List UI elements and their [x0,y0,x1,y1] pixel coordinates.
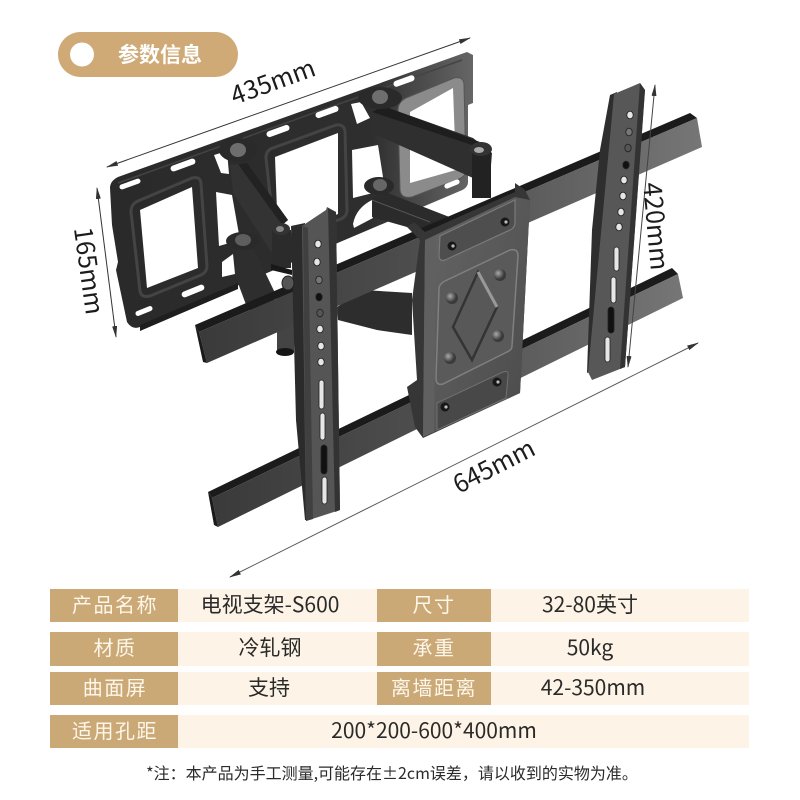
window 3 [398,78,466,197]
arm: centre rear [337,290,412,335]
plate slots [119,74,460,317]
row 2: material and load: 承重 [412,632,456,661]
dimension line: 645mm [230,343,698,577]
lower crossbar [208,268,683,527]
row 3: curved screen and wall distance [50,672,749,705]
row 4: hole spacing [50,715,749,748]
rail holes [605,111,633,362]
dimension line: 645mm: 645mm [446,429,541,501]
wall plate [110,52,473,331]
row 3: curved screen and wall distance: 支持 [248,672,290,702]
bolts [440,218,510,412]
dimension line: 435mm [107,38,470,167]
row 1: name and size: 32-80英寸 [542,589,638,619]
row 4: hole spacing: 适用孔距 [72,715,158,744]
diamond [453,272,497,360]
row 3: curved screen and wall distance: 离墙距离 [391,672,477,701]
row 1: name and size: 电视支架-S600 [201,589,339,619]
row 1: name and size: 尺寸 [412,589,456,618]
upper crossbar [195,113,702,363]
row 3: curved screen and wall distance: 42-350mm [541,672,645,702]
row 2: material and load: 材质 [94,632,136,661]
dimension line: 165mm: 165mm [66,225,114,317]
dimension line: 165mm [66,188,116,337]
arm: upper right [358,87,492,198]
spec table [50,589,749,748]
row 1: name and size: 产品名称 [72,589,158,618]
footnote: *注：本产品为手工测量,可能存在±2cm误差，请以收到的实物为准。 [146,760,638,784]
dimension line: 435mm: 435mm [225,49,320,113]
dimples [444,269,506,364]
swivel arms [219,87,492,356]
window 2 [266,125,347,240]
rail holes [314,240,327,504]
row 1: name and size [50,589,749,622]
row 3: curved screen and wall distance: 曲面屏 [83,672,147,701]
header pill: 参数信息: 参数信息 [118,39,202,69]
header pill: 参数信息 [58,32,238,77]
upper recess [439,200,515,260]
dimension line: 420mm [628,85,679,367]
row 2: material and load [50,632,749,666]
left vertical rail [282,207,340,521]
plate cut-outs [214,102,385,277]
arm: upper left [219,138,288,253]
right vertical rail [587,83,645,380]
dimension line: 420mm: 420mm [635,181,679,271]
row 4: hole spacing: 200*200-600*400mm [331,715,537,745]
inner panel [436,250,518,384]
window 1 [131,178,207,296]
row 2: material and load: 50kg [567,632,613,662]
lower recess [437,372,508,430]
arm: lower left and column [226,223,294,356]
centre mounting plate [407,183,530,438]
arm: lower right [364,177,452,232]
row 2: material and load: 冷轧钢 [238,632,302,662]
